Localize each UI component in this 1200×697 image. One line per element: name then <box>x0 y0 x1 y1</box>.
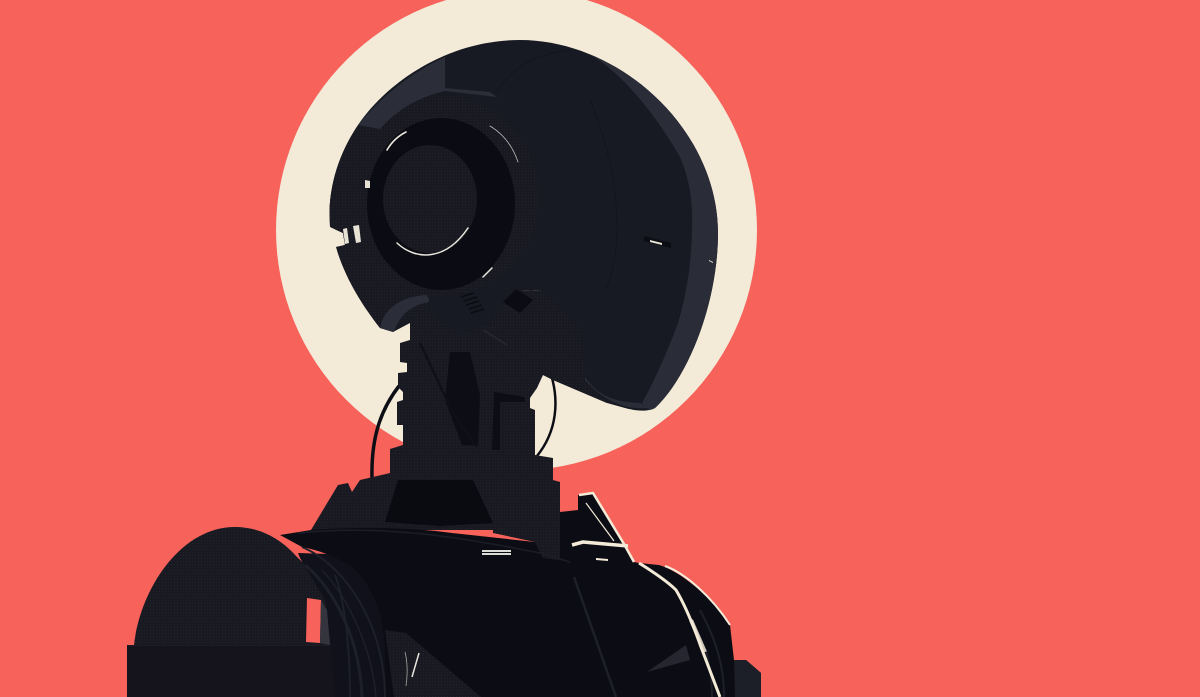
jaw dark block <box>503 289 533 313</box>
illustration: robot portrait <box>127 0 761 697</box>
helmet top panel <box>358 57 445 129</box>
chest ticks <box>482 550 608 561</box>
neck shadows <box>445 352 480 445</box>
torso textured panel <box>493 477 560 560</box>
lower left cheek <box>330 192 427 330</box>
collar line <box>298 530 570 562</box>
arm rings <box>302 547 385 697</box>
eye socket <box>367 118 515 290</box>
right arm rings <box>700 610 724 697</box>
forearm panel <box>385 630 481 697</box>
arm opening <box>306 598 321 643</box>
jaw plate <box>410 290 607 403</box>
jaw strut <box>483 330 507 345</box>
torso <box>280 493 761 697</box>
jaw arc <box>380 295 430 335</box>
cheek ring <box>329 94 539 298</box>
chest trapezoid <box>385 480 493 526</box>
torso seam <box>574 577 616 697</box>
neck rod <box>420 343 477 447</box>
helmet underside band <box>585 377 650 408</box>
arm base shadow <box>127 646 342 697</box>
neck and jaw <box>311 290 607 530</box>
eye highlights <box>387 126 518 277</box>
left side lights <box>343 180 370 244</box>
wires <box>372 378 555 478</box>
jaw vents <box>461 293 484 313</box>
arm cylinder <box>298 553 400 697</box>
cream trim: shoulder fin <box>572 493 730 697</box>
jaw mechanical block <box>428 290 510 335</box>
eye disc <box>383 145 477 253</box>
arm dome <box>127 527 345 697</box>
side ticks <box>644 236 713 263</box>
right end block <box>734 660 761 697</box>
helmet <box>320 30 730 420</box>
arm grey edge <box>320 600 330 645</box>
right arm cone <box>647 645 690 672</box>
forearm highlights <box>405 652 419 686</box>
helmet seams <box>497 50 617 290</box>
helmet rim band <box>588 54 718 410</box>
helmet top strip <box>445 88 497 97</box>
halo disc <box>276 0 757 470</box>
